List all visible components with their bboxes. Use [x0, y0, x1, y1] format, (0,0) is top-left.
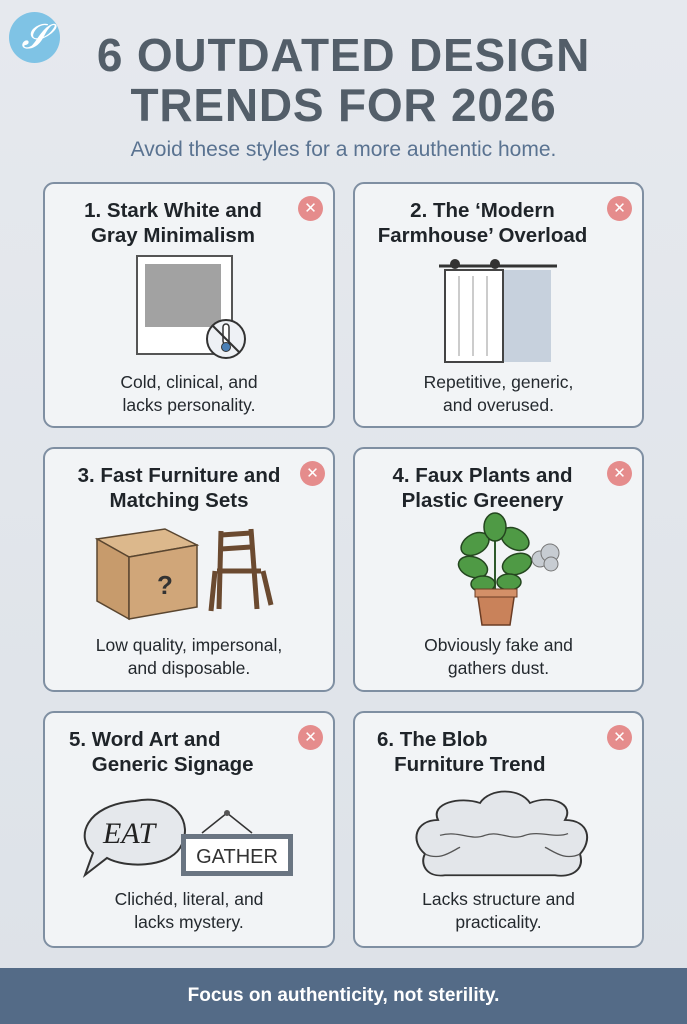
illustration: blob sofa	[415, 790, 588, 877]
x icon	[607, 725, 632, 750]
card 2 caption: Repetitive, generic,	[424, 372, 573, 392]
x icon: ✕	[613, 465, 626, 482]
card 4 caption: Obviously fake and	[424, 635, 573, 655]
card 1 heading	[84, 199, 262, 247]
panel: card 6	[353, 711, 644, 948]
card 1 heading: Gray Minimalism	[91, 224, 255, 247]
card 3 heading	[78, 464, 280, 512]
illustration: box and chair	[94, 528, 274, 620]
illustration: box and chair: ?	[157, 570, 173, 600]
card 1 caption: Cold, clinical, and	[120, 372, 258, 392]
x icon	[298, 196, 323, 221]
title: 6 OUTDATED DESIGN	[97, 29, 590, 81]
card 3 caption: Low quality, impersonal,	[96, 635, 282, 655]
x icon	[607, 461, 632, 486]
card 5 heading: 5. Word Art and	[69, 728, 220, 751]
card 2 heading: Farmhouse’ Overload	[378, 224, 587, 247]
x icon: ✕	[613, 729, 626, 746]
card 6 heading: Furniture Trend	[394, 753, 546, 776]
card 2 caption	[424, 372, 573, 415]
x icon	[607, 196, 632, 221]
illustration: EAT bubble and GATHER sign: GATHER	[196, 846, 278, 868]
card 2 heading: 2. The ‘Modern	[410, 199, 555, 222]
panel: card 1	[43, 182, 335, 428]
panel: card 5	[43, 711, 335, 948]
card 1 caption: lacks personality.	[123, 395, 255, 415]
card 4 heading: Plastic Greenery	[402, 489, 563, 512]
card 1 heading: 1. Stark White and	[84, 199, 262, 222]
card 4 heading: 4. Faux Plants and	[392, 464, 572, 487]
card 3 heading: 3. Fast Furniture and	[78, 464, 280, 487]
panel: card 3	[43, 447, 335, 692]
x icon: ✕	[306, 465, 319, 482]
x icon: ✕	[304, 729, 317, 746]
card 2 caption: and overused.	[443, 395, 554, 415]
illustration: faux plant with dust	[458, 512, 560, 626]
card 6 heading: 6. The Blob	[377, 728, 487, 751]
panel: card 4	[353, 447, 644, 692]
card 3 caption	[96, 635, 282, 678]
card 2 heading	[378, 199, 587, 247]
footer banner	[0, 968, 687, 1024]
subtitle: Avoid these styles for a more authentic home.	[131, 138, 556, 161]
illustration: gray frame and thermometer	[136, 255, 246, 359]
footer banner: Focus on authenticity, not sterility.	[188, 985, 499, 1006]
card 5 caption: Clichéd, literal, and	[115, 889, 263, 909]
x icon	[300, 461, 325, 486]
card 6 heading	[377, 728, 546, 776]
card 3 caption: and disposable.	[128, 658, 250, 678]
card 4 heading	[392, 464, 572, 512]
illustration: EAT bubble and GATHER sign	[82, 798, 293, 878]
card 3 heading: Matching Sets	[110, 489, 248, 512]
illustration: EAT bubble and GATHER sign: EAT	[102, 817, 158, 850]
card 6 caption	[422, 889, 575, 932]
card 5 caption: lacks mystery.	[134, 912, 244, 932]
card 6 caption: practicality.	[455, 912, 542, 932]
card 5 caption	[115, 889, 263, 932]
card 4 caption: gathers dust.	[448, 658, 549, 678]
logo icon: 𝓢	[21, 19, 48, 56]
title: TRENDS FOR 2026	[130, 79, 557, 131]
x icon	[298, 725, 323, 750]
card 4 caption	[424, 635, 573, 678]
panel: card 2	[353, 182, 644, 428]
card 1 caption	[120, 372, 258, 415]
card 6 caption: Lacks structure and	[422, 889, 575, 909]
title	[97, 29, 590, 131]
logo icon	[9, 12, 60, 63]
card 5 heading: Generic Signage	[92, 753, 254, 776]
x icon: ✕	[304, 200, 317, 217]
x icon: ✕	[613, 200, 626, 217]
illustration: barn door	[439, 259, 557, 363]
card 5 heading	[69, 728, 254, 776]
